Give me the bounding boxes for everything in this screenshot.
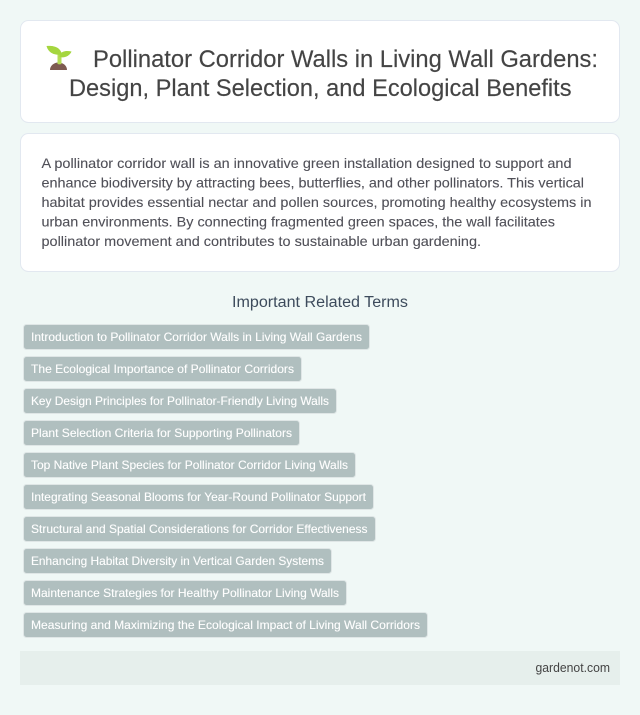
term chip 9 xyxy=(24,580,346,606)
term chip 10: Measuring and Maximizing the Ecological Impact of Living Wall Corridors xyxy=(31,618,420,632)
term chip 5: Top Native Plant Species for Pollinator Corridor Living Walls xyxy=(31,458,348,472)
footer text: source: gardenot.com xyxy=(536,661,610,675)
footer bar xyxy=(20,651,620,685)
text block: description xyxy=(42,155,592,249)
term chip 6: Integrating Seasonal Blooms for Year-Round Pollinator Support xyxy=(31,490,367,504)
term chip 4: Plant Selection Criteria for Supporting Pollinators xyxy=(31,426,292,440)
term chip 8: Enhancing Habitat Diversity in Vertical Garden Systems xyxy=(31,554,324,568)
term chip 1 xyxy=(24,324,370,350)
term chip 10 xyxy=(24,612,428,638)
term chip 2: The Ecological Importance of Pollinator Corridors xyxy=(31,362,294,376)
title: Design, Plant Selection, and Ecological Benefits xyxy=(69,76,572,102)
panel: description card xyxy=(20,134,620,272)
term chip 4 xyxy=(24,420,300,446)
text block: description: urban environments. By connecting fragmented green spaces, the wall facilitates xyxy=(42,214,555,230)
text block: description: pollinator movement and contributes to sustainable urban gardening. xyxy=(42,233,481,249)
term chip 6 xyxy=(24,484,374,510)
panel: header card xyxy=(20,20,620,122)
icon: seedling xyxy=(46,46,72,70)
title xyxy=(69,47,598,102)
term chip 5 xyxy=(24,452,356,478)
term chip 7: Structural and Spatial Considerations for Corridor Effectiveness xyxy=(31,522,368,536)
term chip 3 xyxy=(24,388,336,414)
term chip 1: Introduction to Pollinator Corridor Walls in Living Wall Gardens xyxy=(31,330,362,344)
title: Pollinator Corridor Walls in Living Wall Gardens: xyxy=(93,47,598,73)
term chip 7 xyxy=(24,516,376,542)
text block: description: habitat provides essential nectar and pollen sources, promoting healthy ecosystems in xyxy=(42,194,592,210)
text block: description: A pollinator corridor wall is an innovative green installation designed to support and xyxy=(42,155,572,171)
term chip 9: Maintenance Strategies for Healthy Pollinator Living Walls xyxy=(31,586,339,600)
term chip 3: Key Design Principles for Pollinator-Friendly Living Walls xyxy=(31,394,329,408)
term chip 2 xyxy=(24,356,302,382)
heading: important related terms: Important Related Terms xyxy=(232,294,408,311)
term chip 8 xyxy=(24,548,332,574)
text block: description: enhance biodiversity by attracting bees, butterflies, and other pollinators. This vertical xyxy=(42,174,584,190)
list of related terms xyxy=(24,324,428,638)
